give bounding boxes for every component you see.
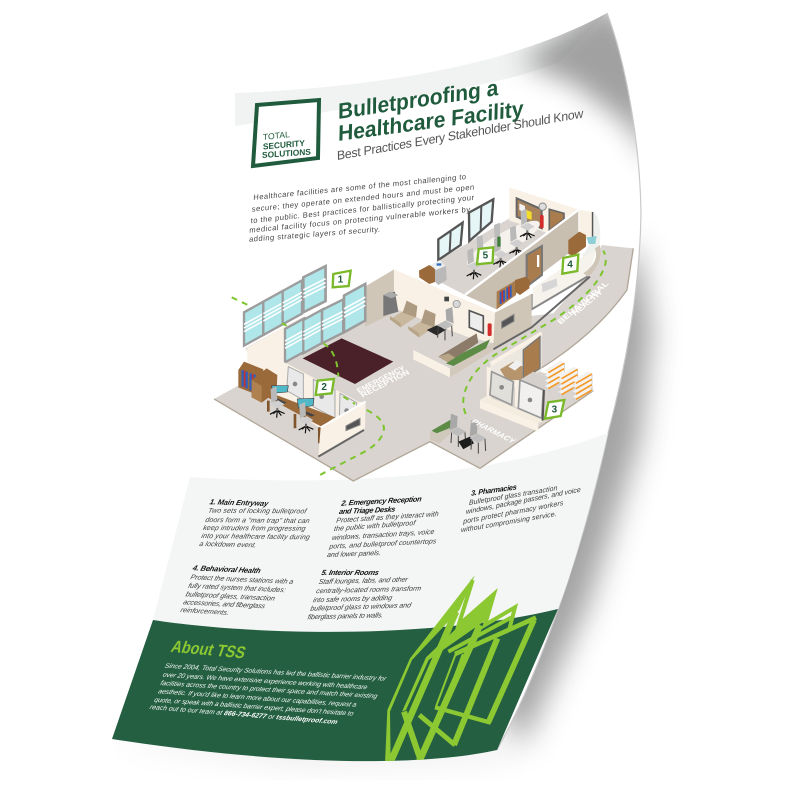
logo: Total Security Solutions: TOTAL: [263, 129, 290, 142]
logo: Total Security Solutions: SOLUTIONS: [262, 147, 311, 160]
floor labels: PHARMACY: [469, 418, 519, 445]
about paragraph: [149, 663, 388, 726]
nurses station end wall and glass: [532, 210, 601, 309]
triage desk: [263, 386, 335, 443]
clock: [539, 203, 546, 210]
intro paragraph: secure; they operate on extended hours and must be open: [252, 182, 474, 214]
page right edge highlight: [497, 13, 641, 750]
section 4: behavioral health: Protect the nurses stations with a: [189, 573, 295, 586]
floor labels: BEHAVIORAL: [555, 279, 611, 326]
floor labels: HEALTH: [570, 289, 604, 317]
about paragraph: facilities across the country to protect their space and match their existing: [159, 680, 378, 700]
floor: [214, 245, 633, 481]
door: [549, 209, 564, 231]
page drop shadow: [130, 240, 652, 766]
bulletin board: [517, 198, 542, 228]
section 2: emergency reception: ports, and bulletproof countertops: [328, 537, 437, 551]
number tag 2: 2: [321, 382, 327, 393]
section 2: emergency reception: [326, 494, 439, 559]
number tag 1: 1: [338, 275, 344, 286]
cabinet and copier: [419, 260, 447, 285]
section 1: main entryway: a lockdown event.: [198, 540, 258, 549]
section 5: interior rooms: into safe rooms by adding: [312, 594, 393, 604]
lobby rear walls: [365, 269, 590, 349]
section 3: pharmacies: windows, package passers, and voice: [466, 487, 581, 516]
section 1: main entryway: doors form a “man trap” that can: [205, 516, 310, 525]
section 5: interior rooms: Staff lounges, labs, and other: [318, 576, 409, 586]
lounge table with chairs: [462, 209, 544, 279]
isometric floor plan: [214, 187, 633, 481]
section 5: interior rooms: centrally-located rooms transform: [315, 585, 422, 595]
waiting area furniture: [383, 292, 454, 340]
section 3: pharmacies: 3. Pharmacies: [471, 482, 517, 498]
about paragraph: over 20 years. We have extensive experience working with healthcare: [162, 672, 369, 691]
beige corridor wall: [465, 210, 578, 309]
number tag 3: 3: [552, 405, 558, 416]
about heading: About TSS: [169, 636, 249, 662]
section 2: emergency reception: Protect staff as they interact with: [336, 510, 439, 525]
notice board: [469, 311, 483, 333]
floor labels: EMERGENCY: [355, 364, 407, 395]
title: Bulletproofing a: [338, 75, 499, 124]
about paragraph: reach out to our team at 866-734-6277 or tssbulletproof.com: [149, 704, 338, 726]
section 4: behavioral health: accessories, and fiberglass: [182, 598, 267, 610]
entry mat: [303, 338, 393, 384]
section 4: behavioral health: 4. Behavioral Health: [191, 563, 262, 575]
paper sheet: [112, 13, 641, 761]
section 1: main entryway: Two sets of locking bulletproof: [207, 507, 308, 515]
section 5: interior rooms: bulletproof glass to windows and: [310, 601, 413, 613]
intro paragraph: Healthcare facilities are some of the most challenging to: [253, 172, 466, 202]
entry glass doors: [244, 266, 365, 363]
number tag 3: [545, 400, 564, 419]
waiting chairs with planter: [430, 414, 486, 454]
section 4: behavioral health: bulletproof glass, transaction: [185, 590, 276, 603]
number tag 5: [477, 247, 493, 264]
section 5: interior rooms: [307, 568, 422, 621]
section 3: pharmacies: without compromising service.: [461, 511, 557, 534]
pharmacy storage shelves: [545, 361, 593, 403]
section 3: pharmacies: ports protect pharmacy workers: [462, 500, 564, 526]
sign: [502, 314, 514, 328]
section 3: pharmacies: Bulletproof glass transaction: [469, 485, 557, 507]
intro paragraph: medical facility focus on protecting vulnerable workers by: [249, 205, 470, 235]
title: Healthcare Facility: [338, 96, 524, 146]
section 2: emergency reception: and lower panels.: [326, 549, 382, 559]
panel: numbered descriptions background: [153, 433, 608, 632]
lounge back wall: [509, 187, 578, 233]
wall items: [444, 297, 460, 308]
bookshelf: [497, 280, 517, 309]
shelves and cabinet: [238, 362, 277, 403]
section 4: behavioral health: reinforcements.: [179, 606, 230, 617]
logo: Total Security Solutions: SECURITY: [263, 138, 305, 152]
panel: about band: [112, 609, 558, 761]
about paragraph: Since 2004, Total Security Solutions has led the ballistic barrier industry for: [164, 663, 388, 683]
triage booths: [247, 348, 366, 428]
intro paragraph: [249, 172, 475, 244]
fire extinguisher: [540, 215, 544, 228]
number tag 2: [316, 379, 334, 395]
number tag 4: [562, 255, 578, 274]
logo mark: lime crown lines: [385, 575, 536, 763]
section 5: interior rooms: fiberglass panels to walls.: [307, 611, 384, 621]
lounge floor: [420, 218, 548, 295]
section 2: emergency reception: and Triage Desks: [338, 505, 396, 516]
number tag 5: 5: [483, 251, 489, 262]
section 3: pharmacies: [461, 482, 581, 534]
section 1: main entryway: into your healthcare facility during: [201, 532, 311, 541]
intro paragraph: adding strategic layers of security.: [249, 225, 380, 244]
intro paragraph: to the public. Best practices for ballistically protecting your: [251, 193, 475, 225]
logo: Total Security Solutions: [253, 100, 319, 166]
page curl shading: [235, 13, 638, 162]
lounge windows: [438, 199, 493, 260]
section 5: interior rooms: 5. Interior Rooms: [320, 568, 380, 577]
extinguisher: [488, 323, 492, 336]
section 2: emergency reception: windows, transaction trays, voice: [331, 528, 435, 542]
pharmacy room: [480, 332, 545, 432]
about paragraph: aesthetic. If you'd like to learn more about our capabilities, request a: [157, 689, 358, 709]
section 2: emergency reception: the public with bulletproof: [333, 519, 417, 533]
section 1: main entryway: keep intruders from progressing: [202, 524, 306, 533]
section 1: main entryway: [198, 497, 311, 549]
about paragraph: quote, or speak with a ballistic barrier expert, please don't hesitate to: [153, 697, 355, 718]
floor labels: RECEPTION: [358, 368, 411, 399]
subtitle: Best Practices Every Stakeholder Should Know: [337, 106, 584, 163]
section 2: emergency reception: 2. Emergency Reception: [340, 494, 423, 508]
door: [527, 246, 542, 287]
reception low wall with sofa and plants: [413, 333, 493, 377]
triage end wall: [318, 402, 366, 457]
dashed route lines: [232, 251, 606, 477]
section 1: main entryway: 1. Main Entryway: [209, 497, 270, 508]
number tag 1: [333, 271, 351, 287]
number tag 4: 4: [567, 259, 573, 270]
floor labels: [355, 279, 611, 445]
section 4: behavioral health: [179, 563, 295, 617]
section 4: behavioral health: fully rated system that includes:: [187, 582, 287, 594]
